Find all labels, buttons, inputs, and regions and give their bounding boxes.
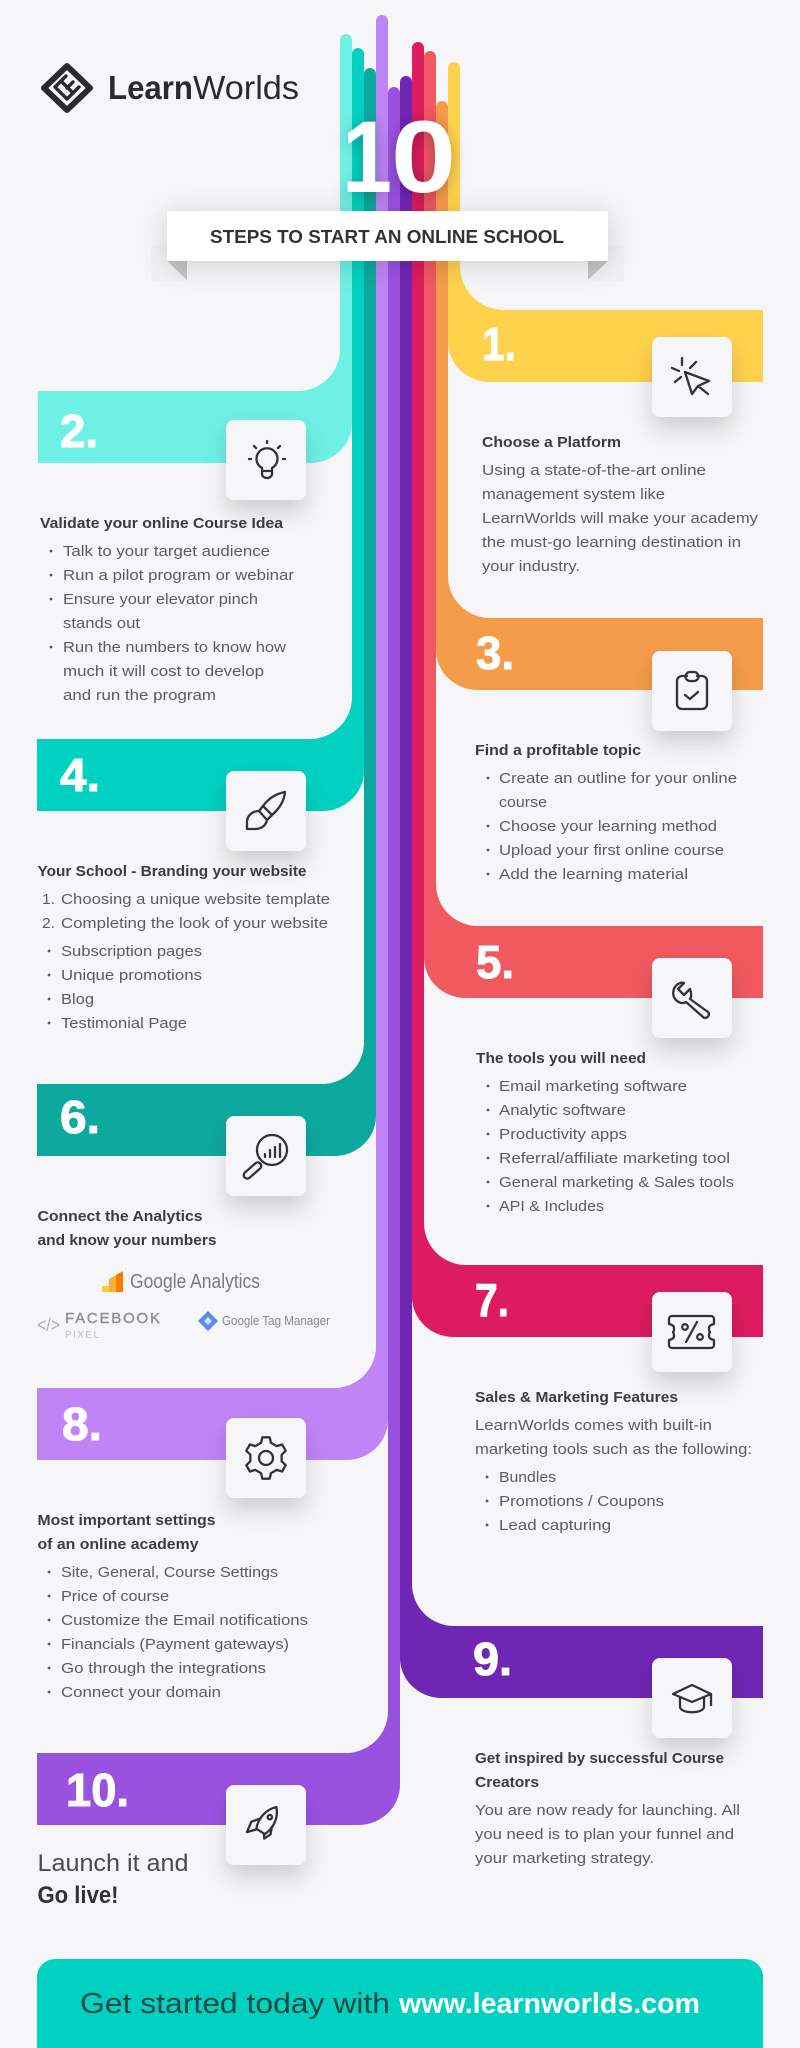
heading: Find a profitable topic	[475, 742, 641, 759]
logo: Facebook Pixel: </>	[37, 1315, 60, 1335]
heading: Validate your online Course Idea	[40, 515, 284, 532]
banner strip	[167, 211, 608, 261]
body text: Using a state-of-the-art online	[482, 462, 706, 479]
numbered list: Completing the look of your website	[61, 915, 328, 932]
bullet list: Referral/affiliate marketing tool	[499, 1150, 730, 1167]
body text	[482, 462, 759, 575]
heading	[38, 1208, 216, 1249]
logo wordmark: Learn	[108, 69, 193, 106]
ribbon: step 9 dark purple	[400, 76, 763, 1698]
bullet list: and run the program	[63, 687, 216, 704]
number 2: 2.	[60, 405, 98, 457]
panel: step 4 branding	[38, 749, 330, 1032]
closing text: Launch it and	[38, 1850, 188, 1877]
bullet list: Productivity apps	[499, 1126, 627, 1143]
bullet list: Upload your first online course	[499, 842, 724, 859]
numbered list	[42, 891, 330, 932]
bullet list: Site, General, Course Settings	[61, 1564, 278, 1581]
bullet list: course	[499, 794, 547, 811]
bullet list	[50, 543, 294, 704]
bullet list: Financials (Payment gateways)	[61, 1636, 289, 1653]
bullet list	[48, 943, 202, 1032]
panel: step 5 tools	[476, 936, 734, 1215]
closing text: Go live!	[38, 1882, 118, 1909]
ribbon: step 4 teal	[37, 48, 364, 811]
body text: the must-go learning destination in	[482, 534, 741, 551]
ribbon: step 10 purple	[37, 87, 400, 1825]
bullet list: Choose your learning method	[499, 818, 717, 835]
ribbon: step 6 dark teal	[37, 68, 376, 1156]
logo: Google Tag Manager: Google Tag Manager	[222, 1313, 331, 1328]
bullet list: Testimonial Page	[61, 1015, 187, 1032]
bullet list: much it will cost to develop	[63, 663, 264, 680]
heading: Get inspired by successful Course	[475, 1750, 724, 1767]
number 8: 8.	[62, 1398, 102, 1450]
bullet list: Ensure your elevator pinch	[63, 591, 258, 608]
body text: You are now ready for launching. All	[475, 1802, 740, 1819]
heading: and know your numbers	[38, 1232, 216, 1249]
body text	[475, 1802, 740, 1867]
number 9: 9.	[473, 1633, 512, 1685]
numbered list: Choosing a unique website template	[61, 891, 330, 908]
icon card: paint brush	[226, 771, 306, 851]
banner folds	[151, 245, 624, 281]
bullet list: Run the numbers to know how	[63, 639, 286, 656]
heading: The tools you will need	[476, 1050, 646, 1067]
bullet list: General marketing & Sales tools	[499, 1174, 734, 1191]
bullet list: Run a pilot program or webinar	[63, 567, 294, 584]
call to action bar	[37, 1959, 763, 2048]
ribbon: step 7 pink	[412, 42, 763, 1337]
bullet list: Lead capturing	[499, 1517, 611, 1534]
heading: Connect the Analytics	[38, 1208, 202, 1225]
heading: Creators	[475, 1774, 539, 1791]
bullet list: Email marketing software	[499, 1078, 687, 1095]
body text: management system like	[482, 486, 665, 503]
call to action bar: Get started today with	[80, 1988, 390, 2020]
ribbon: step 2 light teal	[38, 34, 352, 463]
logo: Google Analytics: Google Analytics	[130, 1271, 260, 1293]
bullet list	[487, 1078, 734, 1215]
panel: step 6 analytics	[37, 1091, 331, 1341]
body text: your marketing strategy.	[475, 1850, 654, 1867]
panel: step 8 settings	[38, 1398, 308, 1701]
bullet list: Talk to your target audience	[63, 543, 270, 560]
icon card: discount ticket	[652, 1292, 732, 1372]
bullet list: Connect your domain	[61, 1684, 221, 1701]
numbered list: 1.	[42, 891, 55, 908]
bullet list	[48, 1564, 308, 1701]
logo: Facebook Pixel: PIXEL	[65, 1330, 99, 1341]
panel: step 2 validate	[40, 405, 306, 704]
body text: marketing tools such as the following:	[475, 1441, 752, 1458]
bullet list: Unique promotions	[61, 967, 202, 984]
number 5: 5.	[476, 936, 514, 988]
panel: step 10 go live	[38, 1764, 306, 1909]
bullet list: stands out	[63, 615, 141, 632]
ribbon: step 3 orange	[436, 101, 763, 690]
bullet list: API & Includes	[499, 1198, 604, 1215]
bullet list: Analytic software	[499, 1102, 626, 1119]
bullet list	[487, 770, 737, 883]
ribbon: step 5 coral	[424, 51, 763, 998]
bullet list: Subscription pages	[61, 943, 202, 960]
bullet list: Promotions / Coupons	[499, 1493, 664, 1510]
panel: step 3 topic	[475, 627, 737, 883]
logo: Facebook Pixel	[37, 1310, 160, 1341]
bullet list: Blog	[61, 991, 94, 1008]
number 4: 4.	[60, 749, 100, 801]
logo: LearnWorlds: Worlds	[193, 69, 299, 106]
heading: Sales & Marketing Features	[475, 1389, 678, 1406]
icon card: cursor click	[652, 337, 732, 417]
body text: LearnWorlds comes with built-in	[475, 1417, 712, 1434]
icon card: light bulb	[226, 420, 306, 500]
call to action bar: www.learnworlds.com	[398, 1988, 700, 2020]
number 7: 7.	[475, 1274, 509, 1326]
panel: step 1 choose a platform	[482, 318, 759, 575]
title number 10: 0	[391, 100, 456, 214]
icon card: graduation cap	[652, 1658, 732, 1738]
bullet list: Customize the Email notifications	[61, 1612, 308, 1629]
body text	[475, 1417, 752, 1458]
heading: Your School - Branding your website	[38, 863, 306, 880]
heading	[475, 1750, 724, 1791]
bullet list	[486, 1469, 664, 1534]
icon card: rocket	[226, 1785, 306, 1865]
bullet list: Add the learning material	[499, 866, 688, 883]
bullet list: Bundles	[499, 1469, 556, 1486]
body text: you need is to plan your funnel and	[475, 1826, 734, 1843]
ribbon: step 8 lilac	[37, 15, 388, 1460]
logo: Facebook Pixel: FACEBOOK	[65, 1310, 160, 1327]
icon card: gear	[226, 1418, 306, 1498]
bullet list: Go through the integrations	[61, 1660, 266, 1677]
ribbon: step 1 yellow	[448, 62, 763, 382]
icon card: wrench	[652, 958, 732, 1038]
title banner	[151, 211, 624, 281]
banner title text: STEPS TO START AN ONLINE SCHOOL	[210, 227, 564, 247]
title number 10: 1	[342, 100, 392, 214]
heading	[38, 1512, 216, 1553]
number 1: 1.	[482, 318, 516, 370]
closing text	[38, 1850, 188, 1909]
title number 10	[342, 100, 456, 214]
number 3: 3.	[476, 627, 514, 679]
numbered list: 2.	[42, 915, 55, 932]
logo: Google Tag Manager	[198, 1311, 331, 1331]
heading: of an online academy	[38, 1536, 199, 1553]
panel: step 9 inspiration	[473, 1633, 740, 1867]
bullet list: Create an outline for your online	[499, 770, 737, 787]
body text: LearnWorlds will make your academy	[482, 510, 759, 527]
logo: LearnWorlds	[44, 66, 299, 110]
number 6: 6.	[60, 1091, 100, 1143]
icon card: clipboard	[652, 651, 732, 731]
number 10: 10.	[66, 1764, 129, 1816]
icon card: magnifier chart	[226, 1116, 306, 1196]
heading: Most important settings	[38, 1512, 216, 1529]
bullet list: Price of course	[61, 1588, 169, 1605]
heading: Choose a Platform	[482, 434, 621, 451]
body text: your industry.	[482, 558, 580, 575]
panel: step 7 sales and marketing	[475, 1274, 752, 1534]
logo mark	[44, 66, 90, 110]
